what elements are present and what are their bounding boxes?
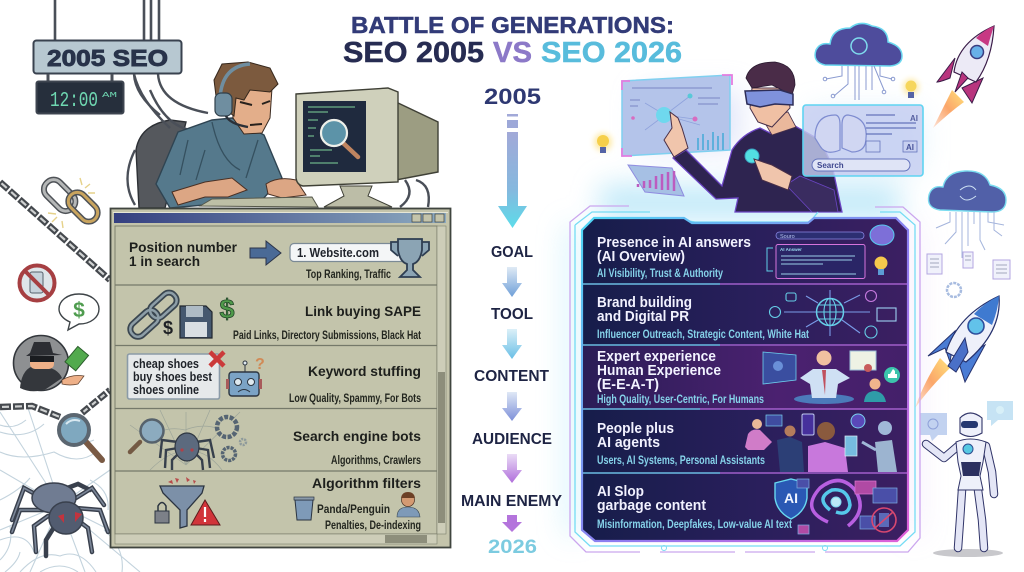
- row: content: Keyword stuffing: [308, 363, 421, 379]
- robot waist: [961, 462, 981, 476]
- monitor stand: [324, 186, 392, 207]
- icon: trophy: [391, 239, 429, 277]
- title: SEO 2026: [541, 37, 682, 69]
- search result pill: [290, 244, 408, 262]
- icon: dollar speech bubble: $: [73, 299, 85, 322]
- chest glow: [745, 149, 759, 163]
- sweater with raised arm: [673, 126, 842, 212]
- robot: [926, 413, 1003, 557]
- AI panel: [582, 218, 908, 541]
- year 2026: 2026: [488, 537, 537, 558]
- shirt torso: [156, 118, 282, 208]
- row: main enemy: AI Slop: [597, 484, 644, 500]
- 2005 SEO hanging sign: [34, 0, 208, 115]
- icon: globe network: [770, 290, 896, 338]
- AI man with holographic screens: [622, 62, 923, 212]
- screen text lines: [308, 107, 355, 163]
- chat bubble glyph right: [987, 401, 1013, 426]
- screen magnifier: [342, 142, 358, 157]
- icon: particles: [168, 477, 196, 484]
- timeline center: [461, 84, 562, 558]
- arrow: [502, 267, 522, 297]
- forearm and hands: [172, 178, 247, 205]
- keyword box: [128, 354, 220, 399]
- retro window panel: [110, 208, 450, 548]
- icon: thief with money: [14, 336, 89, 391]
- pointing arm sleeve: [786, 176, 838, 212]
- icon: banned trash: [872, 508, 896, 532]
- row: content: ?: [255, 356, 265, 373]
- row: main enemy: garbage content: [597, 498, 706, 514]
- row: content: [128, 352, 421, 405]
- row: content: Human Experience: [597, 363, 721, 379]
- title: VS: [493, 37, 532, 69]
- year 2005: 2005: [484, 84, 541, 109]
- AI overview mock: AI Answer: [780, 247, 802, 252]
- office chair: [136, 120, 186, 208]
- AI brain panel: [803, 105, 923, 176]
- icon: arrow: [250, 241, 281, 265]
- row: tool: [127, 290, 421, 342]
- row: main enemy: [597, 479, 897, 534]
- row: tool: Influencer Outreach, Strategic Content, White Hat: [597, 329, 809, 341]
- icon: chain link: [127, 290, 180, 340]
- icon: gears: [217, 417, 237, 437]
- robot head: [960, 413, 982, 436]
- row: main enemy: Panda/Penguin: [317, 502, 390, 516]
- row: content: shoes online: [133, 383, 199, 397]
- window buttons: [412, 214, 444, 222]
- web: [130, 410, 240, 470]
- title: SEO 2005: [343, 37, 484, 69]
- row: goal: Presence in AI answers: [597, 235, 751, 251]
- label: main enemy: MAIN ENEMY: [461, 493, 562, 510]
- AI brain panel: AI: [906, 143, 914, 152]
- label: goal: GOAL: [491, 244, 533, 261]
- arrow: [502, 392, 522, 421]
- icon: broken chain link: [40, 176, 101, 228]
- row: tool: and Digital PR: [597, 309, 689, 325]
- row: main enemy: Penalties, De-indexing: [325, 520, 421, 532]
- rocket lower right: [915, 296, 999, 408]
- row: goal: Position number: [129, 239, 238, 255]
- monitor cables: [400, 180, 429, 207]
- row: audience: Users, AI Systems, Personal Assistants: [597, 455, 765, 467]
- hair: [746, 62, 795, 95]
- row: tool: Brand building: [597, 295, 692, 311]
- vr goggles: [745, 90, 793, 107]
- icon: magnifier: [130, 442, 140, 452]
- robot chest core: [963, 444, 973, 454]
- cable behind chair: [128, 74, 190, 205]
- row: tool: Paid Links, Directory Submissions, Black Hat: [233, 330, 421, 342]
- rocket top: [933, 26, 994, 128]
- icon: stressed person: [397, 507, 420, 517]
- icon: floppy disk: [180, 306, 212, 338]
- icon: warning triangle: [191, 500, 220, 525]
- icon: AI shield: AI: [784, 490, 798, 506]
- icon: brain: [870, 225, 894, 245]
- cloud lower right with circuits: [927, 171, 1010, 297]
- arrow: [502, 515, 522, 532]
- title: BATTLE OF GENERATIONS:: [351, 12, 674, 38]
- title bar: [114, 213, 446, 223]
- row: goal: 1. Website.com: [297, 246, 379, 260]
- label: content: CONTENT: [474, 368, 549, 385]
- icon: spider: [160, 440, 214, 470]
- row: content: Low Quality, Spammy, For Bots: [289, 393, 421, 405]
- row: content: Expert experience: [597, 349, 716, 365]
- icon: bulb left: [594, 133, 612, 153]
- row: goal: [129, 239, 429, 281]
- row: audience: People plus: [597, 421, 674, 437]
- label: tool: TOOL: [491, 306, 533, 323]
- AI brain panel: Search: [817, 161, 844, 170]
- icon: sad robot: [229, 372, 259, 396]
- digital clock 12:00 AM: AM: [102, 92, 118, 100]
- row: content: cheap shoes: [133, 357, 199, 371]
- label: audience: AUDIENCE: [472, 431, 552, 448]
- face: [750, 88, 790, 127]
- raised hand: [664, 112, 688, 157]
- row: goal: AI Visibility, Trust & Authority: [597, 268, 723, 280]
- row: main enemy: Misinformation, Deepfakes, Low-value AI text: [597, 519, 792, 531]
- digital clock 12:00 AM: 12:00: [50, 90, 98, 113]
- title: [343, 12, 682, 69]
- row: audience: AI agents: [597, 435, 660, 451]
- digital clock 12:00 AM: [36, 74, 124, 114]
- cloud with circuits top: [815, 23, 902, 100]
- row: content: buy shoes best: [133, 370, 213, 384]
- docs: [927, 252, 1010, 279]
- main arrow: [498, 114, 527, 228]
- chain upper left: [0, 182, 110, 280]
- shirt folds: [180, 122, 258, 180]
- 2005 SEO hanging sign: 2005 SEO: [47, 45, 168, 71]
- scrollbars: [437, 226, 446, 534]
- web on left: [0, 408, 140, 572]
- row: tool: [597, 290, 896, 341]
- row: content: High Quality, User-Centric, For Humans: [597, 394, 764, 406]
- arrow: [502, 454, 522, 483]
- row: audience: Search engine bots: [293, 428, 421, 444]
- robot torso: [956, 439, 986, 490]
- row: tool: $: [163, 318, 173, 338]
- icon: dollar speech bubble: [59, 294, 99, 330]
- small chart card: [628, 165, 684, 196]
- eyes and mouth: [240, 101, 270, 125]
- row: content: [597, 349, 900, 406]
- row: audience: [597, 414, 897, 472]
- icon: prohibited sign: [20, 266, 54, 300]
- AI overview mock: Souro: [780, 234, 795, 240]
- chain lower left: [0, 390, 110, 417]
- icon: red cross: [210, 352, 224, 366]
- row dividers: [583, 284, 907, 473]
- row: main enemy: Algorithm filters: [312, 475, 421, 491]
- chat bubble glyph left: [920, 413, 947, 441]
- icon: light bulb: [874, 256, 888, 270]
- row: main enemy: [155, 475, 421, 532]
- expert on hologram: [763, 350, 900, 404]
- row: goal: (AI Overview): [597, 249, 685, 265]
- icon: large spider: [12, 483, 108, 556]
- pointing hand: [754, 159, 792, 190]
- row: tool: Link buying SAPE: [305, 303, 421, 319]
- icon: padlock: [155, 511, 169, 523]
- row: goal: 1 in search: [129, 253, 200, 269]
- icon: funnel: [160, 486, 204, 528]
- glow behind AI panel: [566, 90, 920, 535]
- arrow: [502, 329, 522, 359]
- content frame: [115, 226, 437, 534]
- row dividers: [115, 285, 437, 471]
- row: audience: Algorithms, Crawlers: [331, 455, 421, 467]
- row: goal: Top Ranking, Traffic: [306, 269, 391, 281]
- monitor front: [296, 88, 398, 186]
- keyboard: [200, 197, 318, 207]
- people with devices: [745, 414, 897, 472]
- icon: swirl: [812, 480, 860, 526]
- face: [232, 88, 272, 134]
- holographic analytics panel: [622, 75, 732, 156]
- row: content: (E-E-A-T): [597, 377, 659, 393]
- robot limbs: [926, 444, 994, 548]
- hair: [214, 62, 278, 116]
- monitor back: [396, 102, 438, 180]
- icon: AI shield: [775, 479, 807, 519]
- robot visor: [961, 421, 978, 428]
- icon: magnifying glass on chain: [59, 415, 102, 460]
- icon: bulb right: [903, 79, 919, 98]
- monitor screen: [303, 101, 366, 172]
- AI brain panel: AI: [910, 114, 918, 123]
- icon: trash can: [295, 500, 313, 520]
- neck: [762, 112, 796, 135]
- headset: [220, 64, 250, 98]
- AI panel frame: [570, 206, 920, 552]
- row: goal: [597, 225, 894, 280]
- AI overview mock: [767, 232, 865, 278]
- icon: dollar: $: [219, 294, 235, 324]
- pixel man at computer: [128, 62, 438, 208]
- cards: [797, 479, 897, 534]
- row: audience: [130, 410, 421, 470]
